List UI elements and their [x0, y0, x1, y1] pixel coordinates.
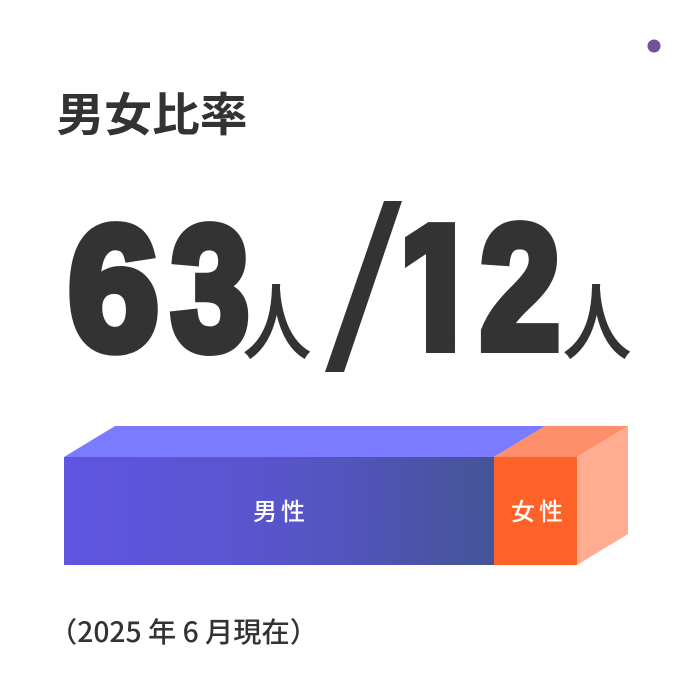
date note: （2025 年 6 月現在）: [49, 611, 318, 651]
unit: person: 人: [563, 256, 631, 376]
label: male: 男性: [253, 492, 309, 527]
digit 3: 3: [171, 190, 249, 387]
unit: person: 人: [243, 256, 311, 376]
3D ratio bar: [64, 426, 628, 565]
male segment top face: [64, 426, 545, 457]
digit 2: 2: [480, 189, 560, 386]
digit 6: 6: [68, 191, 159, 387]
headline figures: 63 men / 12 women: [69, 201, 630, 372]
female segment side face: [577, 426, 628, 565]
title: 男女比率: [56, 79, 248, 145]
digit 1: 1: [387, 191, 487, 392]
decorative purple dot: [648, 40, 660, 52]
female segment front face: [494, 457, 577, 565]
female segment top face: [494, 426, 628, 457]
slash: [325, 201, 402, 372]
label: female: 女性: [511, 492, 567, 527]
male segment front face: [64, 457, 494, 565]
